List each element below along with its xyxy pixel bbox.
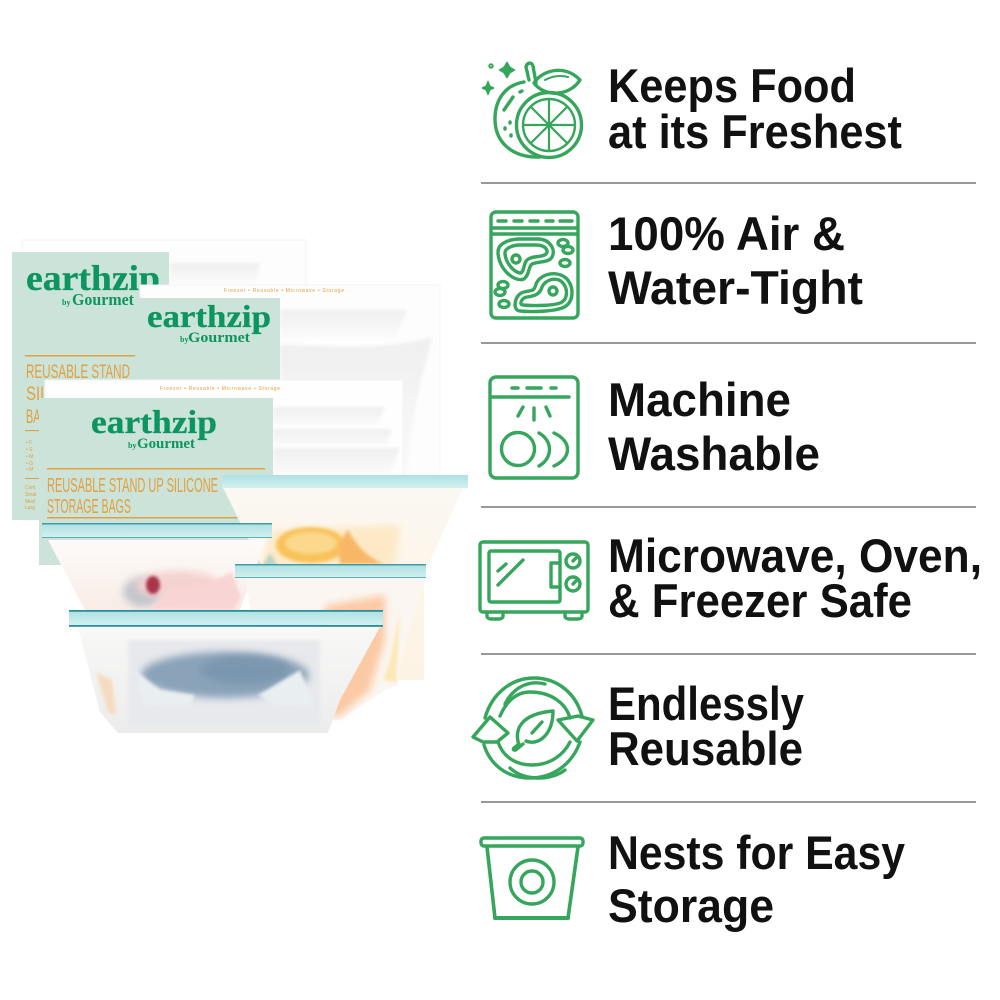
large box: REUSABLE STAND: [26, 362, 130, 383]
heading: endlessly reusable: [608, 677, 804, 775]
small box: Freezer • Reusable • Microwave • Storage: [160, 386, 280, 392]
medium box: Freezer • Reusable • Microwave • Storage: [224, 288, 344, 294]
small box: by: [128, 441, 136, 450]
large box: • M: [26, 454, 33, 460]
large box: Larg: [25, 505, 35, 511]
large box: [12, 240, 306, 520]
medium box: [135, 285, 440, 475]
bag with carrots: [235, 564, 426, 720]
large box: Smal: [25, 492, 36, 498]
heading: air and water tight: Water-Tight: [608, 261, 863, 314]
medium box: Gourmet: [188, 330, 250, 346]
icon: nesting cup: [481, 838, 583, 918]
large box: • M: [26, 467, 33, 473]
large box: SILICONE: [26, 384, 96, 405]
icon: zip bag with steaks: [491, 212, 578, 318]
large box: earthzip: [26, 258, 160, 298]
large box: • F: [26, 440, 32, 446]
front bag with blueberries: [69, 610, 383, 733]
heading: microwave oven freezer safe: Microwave, Oven,: [608, 529, 982, 582]
heading: nests for easy storage: [608, 826, 905, 932]
heading: machine washable: [608, 373, 820, 480]
small box: [39, 380, 403, 565]
heading: air and water tight: 100% Air &: [608, 207, 845, 260]
heading: endlessly reusable: Reusable: [608, 722, 803, 775]
large box: • S: [26, 447, 33, 453]
heading: endlessly reusable: Endlessly: [608, 677, 804, 730]
large box: Cont: [25, 485, 36, 491]
bag with raspberry and fruit: [42, 523, 272, 610]
heading: nests for easy storage: Nests for Easy: [608, 826, 905, 879]
heading: microwave oven freezer safe: & Freezer Safe: [608, 574, 912, 627]
large box: Gourmet: [72, 290, 134, 309]
heading: air and water tight: [608, 207, 863, 314]
heading: keeps food: Keeps Food: [608, 59, 856, 112]
icon: orange: [482, 62, 582, 158]
small box: REUSABLE STAND UP SILICONE: [47, 475, 218, 497]
large box: • G: [26, 461, 33, 467]
icon: reusable leaf: [473, 678, 593, 778]
small box: earthzip: [91, 405, 217, 441]
medium box: earthzip: [147, 298, 271, 334]
heading: keeps food: at its Freshest: [608, 105, 902, 158]
small box: STORAGE BAGS: [47, 496, 131, 518]
heading: nests for easy storage: Storage: [608, 879, 774, 932]
product photo: boxes and bags: [12, 240, 468, 733]
icon: microwave: [480, 542, 588, 619]
heading: keeps food: [608, 59, 902, 158]
large box: Med: [25, 499, 35, 505]
medium box: by: [180, 335, 188, 344]
small box: Gourmet: [137, 436, 195, 452]
heading: microwave oven freezer safe: [608, 529, 982, 627]
icon: dishwasher: [490, 377, 578, 478]
heading: machine washable: Machine: [608, 373, 791, 426]
large box: by: [62, 298, 70, 307]
heading: machine washable: Washable: [608, 427, 820, 480]
large box: BAGS: [26, 407, 56, 428]
bag with orange slices: [222, 475, 468, 680]
